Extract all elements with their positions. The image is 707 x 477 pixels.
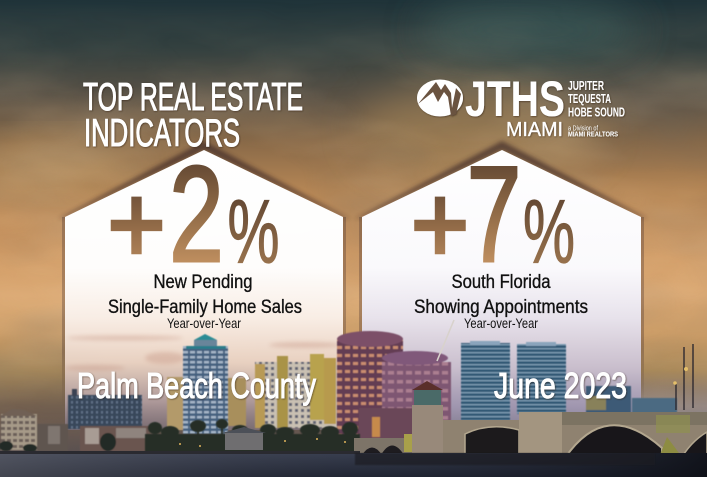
division note: MIAMI REALTORS — [568, 132, 618, 138]
title: TOP REAL ESTATE — [83, 76, 303, 119]
skyline: pink round towers — [337, 331, 451, 442]
stat: +7% — [411, 139, 575, 291]
tagline: place names: TEQUESTA — [568, 91, 611, 106]
number 2: 2 — [169, 139, 224, 291]
logo: JTHS Miami — [417, 71, 625, 141]
text block: new pending home sales: Year-over-Year — [167, 315, 241, 331]
text block: showing appointments: Showing Appointments — [414, 297, 588, 318]
text block: new pending home sales: Single-Family Home Sales — [108, 297, 302, 318]
water — [0, 451, 707, 477]
lamp posts — [673, 344, 693, 410]
location label: Palm Beach County — [77, 365, 316, 406]
palm trees and shoreline vegetation — [145, 419, 360, 453]
percent sign: % — [227, 182, 280, 283]
house panel: right — [355, 141, 648, 430]
percent sign: % — [523, 182, 575, 283]
title: INDICATORS — [84, 112, 240, 155]
tagline: place names: JUPITER — [568, 78, 604, 93]
text block: new pending home sales: New Pending — [154, 272, 252, 293]
division note: a Division of — [568, 126, 598, 132]
text block: showing appointments — [414, 272, 588, 331]
wordmark JTHS: JTHS — [465, 71, 565, 127]
date label: June 2023 — [494, 365, 627, 406]
plus sign: + — [411, 163, 469, 286]
tagline: place names — [568, 78, 625, 120]
stat: +2% — [107, 139, 280, 291]
text block: showing appointments: South Florida — [452, 272, 551, 293]
icon: mountain emblem — [417, 80, 463, 116]
house panel: left — [58, 141, 350, 430]
wordmark MIAMI: MIAMI — [506, 119, 563, 141]
number 7: 7 — [467, 139, 521, 291]
skyline: left waterfront buildings — [0, 389, 150, 452]
skyline: central blue tower — [167, 334, 246, 434]
tagline: place names: HOBE SOUND — [568, 104, 625, 120]
crane — [437, 320, 454, 361]
skyline: cream and yellow condo towers — [255, 354, 337, 428]
title — [83, 76, 303, 155]
bridge with arches and tower — [354, 381, 707, 466]
skyline: two blue condo towers — [461, 341, 677, 421]
plus sign: + — [107, 163, 166, 286]
sky streaks inside houses — [65, 336, 341, 371]
text block: new pending home sales — [108, 272, 302, 331]
division note — [568, 126, 618, 138]
text block: showing appointments: Year-over-Year — [464, 315, 538, 331]
